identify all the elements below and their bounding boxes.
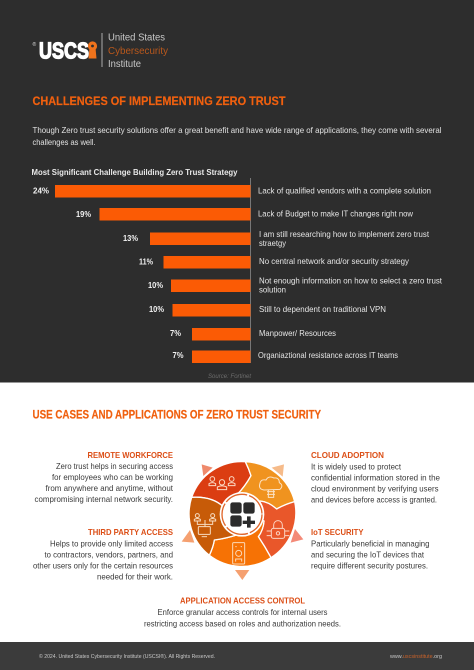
bar chart: straetgy — [259, 238, 287, 248]
bar chart: 19% — [76, 209, 91, 219]
text block: remote workforce: REMOTE WORKFORCE — [88, 450, 173, 460]
intro paragraph: challenges as well. — [32, 137, 96, 147]
segment: remote workforce — [192, 462, 251, 514]
text block: IoT security: and securing the IoT devices that — [311, 550, 425, 560]
logo: USCSI: United States — [108, 32, 165, 44]
text block: IoT security: IoT SECURITY — [311, 527, 364, 537]
text block: remote workforce: for employees who can be working — [52, 472, 173, 482]
bar chart: Lack of Budget to make IT changes right now — [258, 208, 414, 218]
footer bar — [0, 642, 474, 670]
text block: remote workforce: Zero trust helps in securing access — [56, 461, 173, 471]
text block: third party access — [33, 527, 173, 582]
chart title: Most Significant Challenge Building Zero Trust Strategy — [32, 167, 238, 177]
icon: remote users — [209, 477, 235, 490]
arrows around wheel — [182, 464, 303, 580]
text block: third party access: THIRD PARTY ACCESS — [88, 527, 173, 537]
text block: application access control — [144, 596, 341, 628]
icon: cloud — [259, 477, 282, 497]
text block: application access control: APPLICATION ACCESS CONTROL — [180, 596, 305, 606]
icon: device — [233, 543, 245, 564]
intro paragraph: Though Zero trust security solutions offer a great benefit and have wide range of applications, they come with several — [32, 125, 442, 135]
bar chart — [33, 178, 443, 363]
segment: IoT — [242, 501, 296, 558]
bar chart: 7% — [172, 350, 184, 360]
bar chart: 24% — [33, 186, 50, 196]
text block: cloud adoption: It is widely used to protect — [311, 461, 402, 471]
icon: lock — [267, 521, 289, 538]
logo: USCSI — [32, 32, 169, 70]
wheel diagram — [182, 462, 303, 580]
footer bar: © 2024. United States Cybersecurity Institute (USCSI®). All Rights Reserved. — [39, 653, 215, 660]
text block: IoT security: require different security postures. — [311, 560, 428, 570]
segment: cloud — [237, 462, 295, 514]
bar chart: 10% — [148, 280, 163, 290]
text block: cloud adoption: confidential information stored in the — [311, 472, 440, 482]
text block: cloud adoption: CLOUD ADOPTION — [311, 450, 384, 460]
bar chart: I am still researching how to implement zero trust — [259, 229, 430, 239]
bar chart: No central network and/or security strategy — [259, 256, 410, 266]
bar chart: Still to dependent on traditional VPN — [259, 304, 386, 314]
text block: IoT security — [311, 527, 430, 570]
dark header panel — [0, 0, 474, 382]
text block: IoT security: Particularly beneficial in managing — [311, 538, 430, 548]
text block: cloud adoption: cloud environment by verifying users — [311, 484, 438, 494]
logo: USCSI: Cybersecurity — [108, 45, 169, 57]
text block: third party access: to contractors, vendors, partners, and — [44, 550, 173, 560]
text block: remote workforce: from anywhere and anytime, without — [46, 483, 174, 493]
bar chart: 7% — [170, 328, 181, 338]
text block: remote workforce: compromising internal network security. — [34, 494, 173, 504]
icon: network users — [194, 514, 216, 537]
text block: cloud adoption — [311, 450, 440, 504]
segment: third party — [189, 497, 242, 555]
bar chart: Organiaztional resistance across IT teams — [258, 350, 398, 360]
bar chart: Lack of qualified vendors with a complete solution — [258, 186, 431, 196]
text block: application access control: restricting access based on roles and authorization needs. — [144, 618, 341, 628]
text block: third party access: other users only for the certain resources — [33, 560, 173, 570]
logo: USCSI: USCS — [39, 38, 89, 64]
bar chart: Manpower/ Resources — [259, 328, 336, 338]
text block: cloud adoption: and devices before access is granted. — [311, 494, 437, 504]
text block: third party access: needed for their work. — [97, 572, 173, 582]
intro paragraph — [32, 125, 442, 147]
text block: application access control: Enforce granular access controls for internal users — [158, 607, 328, 617]
centre hub — [220, 492, 264, 537]
bar chart: solution — [259, 284, 286, 294]
bar chart: 13% — [123, 233, 138, 243]
bar chart: 11% — [139, 256, 153, 266]
text block: remote workforce — [34, 450, 174, 504]
segment: access control — [209, 514, 271, 566]
logo: USCSI: ® — [32, 41, 36, 48]
text block: third party access: Helps to provide only limited access — [50, 538, 173, 548]
source note: Source: Fortinet — [208, 373, 252, 380]
footer bar: www.uscsinstitute.org — [389, 654, 442, 660]
heading: use cases: USE CASES AND APPLICATIONS OF ZERO TRUST SECURITY — [32, 408, 321, 422]
heading: challenges: CHALLENGES OF IMPLEMENTING ZERO TRUST — [32, 94, 286, 108]
bar chart: 10% — [149, 304, 164, 314]
bar chart: Not enough information on how to select a zero trust — [259, 276, 443, 286]
logo: USCSI: Institute — [108, 58, 141, 70]
